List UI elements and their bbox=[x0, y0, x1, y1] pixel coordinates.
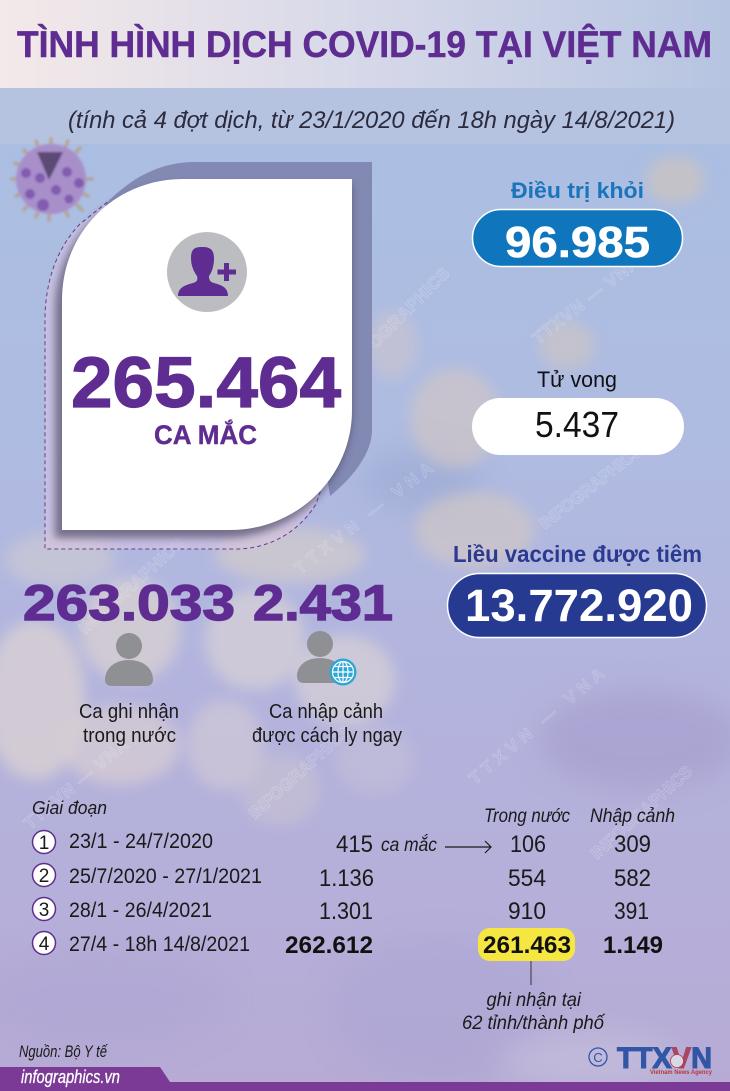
table: cases by period bbox=[32, 798, 675, 961]
number: 5.437 bbox=[535, 404, 619, 445]
card shadow bbox=[55, 185, 352, 538]
background: INFOGRAPHICS bbox=[587, 762, 696, 863]
footer bar bbox=[0, 1067, 730, 1091]
dashed outline bbox=[45, 200, 352, 549]
imported label: Ca nhập cảnh bbox=[269, 701, 383, 723]
imported cases bbox=[252, 575, 402, 747]
heading: Tử vong bbox=[537, 367, 617, 392]
row 4: 261.463 bbox=[483, 932, 571, 959]
stat: vaccine doses bbox=[448, 541, 706, 638]
number: 13.772.920 bbox=[465, 580, 693, 631]
pill bbox=[472, 210, 682, 266]
row 1: ca mắc bbox=[381, 835, 437, 856]
row 1: 23/1 - 24/7/2020 bbox=[69, 830, 213, 853]
column heading: domestic: Trong nước bbox=[484, 806, 570, 827]
heading: Liều vaccine được tiêm bbox=[453, 541, 702, 567]
row 2: 25/7/2020 - 27/1/2021 bbox=[69, 865, 262, 888]
row 1 bbox=[32, 830, 651, 858]
imported number: 2.431 bbox=[253, 575, 393, 631]
row 4: 1.149 bbox=[603, 932, 663, 959]
heading: Điều trị khỏi bbox=[511, 178, 644, 203]
icon: person bbox=[105, 633, 153, 686]
source: Nguồn: Bộ Y tế bbox=[19, 1042, 108, 1061]
icon: person with globe bbox=[297, 631, 356, 686]
callout: 62 provinces bbox=[462, 961, 605, 1034]
row 3: 391 bbox=[614, 898, 649, 925]
panel: total cases bbox=[45, 162, 372, 549]
background: INFOGRAPHICS bbox=[245, 722, 354, 823]
background: TTXVN — VNA bbox=[529, 253, 643, 348]
background: TTXVN — VNA bbox=[291, 459, 436, 578]
row 2: 1.136 bbox=[319, 865, 374, 892]
background: TTXVN — VNA bbox=[465, 664, 608, 788]
row 4: 27/4 - 18h 14/8/2021 bbox=[69, 933, 250, 956]
logo: TTXVN: TTXVN bbox=[617, 1042, 712, 1075]
pill bbox=[472, 398, 684, 455]
label: ca mắc: CA MẮC bbox=[154, 419, 257, 450]
imported label: được cách ly ngay bbox=[252, 725, 402, 747]
row 3: 1.301 bbox=[319, 898, 373, 925]
background: INFOGRAPHICS bbox=[536, 441, 646, 533]
row 1: 309 bbox=[614, 831, 651, 858]
header band bbox=[0, 0, 730, 144]
logo: TTXVN: Vietnam News Agency bbox=[650, 1069, 712, 1076]
domestic label: trong nước bbox=[83, 725, 176, 747]
row 3: 28/1 - 26/4/2021 bbox=[69, 899, 212, 922]
logo: TTXVN: C bbox=[593, 1050, 603, 1065]
row 1: 415 bbox=[336, 831, 373, 858]
domestic label: Ca ghi nhận bbox=[79, 701, 179, 723]
background: INFOGRAPHICS bbox=[75, 534, 188, 638]
background: INFOGRAPHICS bbox=[344, 264, 453, 373]
title: TÌNH HÌNH DỊCH COVID-19 TẠI VIỆT NAM bbox=[17, 23, 712, 65]
row 4 bbox=[32, 928, 663, 961]
number: 96.985 bbox=[505, 218, 650, 267]
back shape bbox=[105, 162, 372, 496]
domestic number: 263.033 bbox=[23, 575, 235, 631]
domestic label bbox=[79, 701, 179, 747]
column heading: period: Giai đoạn bbox=[32, 798, 107, 818]
icon: person plus bbox=[167, 232, 247, 312]
callout: 62 provinces: 62 tỉnh/thành phố bbox=[462, 1013, 605, 1034]
background: TTXVN — VNA bbox=[20, 735, 132, 833]
stat: deaths bbox=[472, 367, 684, 455]
row 1: 106 bbox=[510, 831, 546, 858]
row 4: 262.612 bbox=[285, 932, 373, 959]
website: infographics.vn bbox=[21, 1067, 120, 1087]
icon: virus bbox=[12, 139, 92, 220]
imported label bbox=[252, 701, 402, 747]
domestic cases bbox=[23, 575, 235, 747]
row 3: 3 bbox=[39, 900, 49, 921]
stat: recovered bbox=[472, 178, 682, 267]
white card bbox=[62, 179, 352, 530]
row 2 bbox=[32, 864, 651, 892]
pill bbox=[448, 574, 706, 638]
row 2: 2 bbox=[39, 866, 49, 887]
row 1: 1 bbox=[39, 833, 49, 854]
row 2: 554 bbox=[508, 865, 546, 892]
row 4: 4 bbox=[39, 934, 50, 955]
column heading: imported: Nhập cảnh bbox=[590, 806, 675, 827]
row 3 bbox=[32, 898, 649, 925]
callout: 62 provinces: ghi nhận tại bbox=[486, 990, 582, 1011]
row 3: 910 bbox=[508, 898, 546, 925]
subtitle: (tính cả 4 đợt dịch, từ 23/1/2020 đến 18h ngày 14/8/2021) bbox=[68, 107, 675, 134]
row 2: 582 bbox=[614, 865, 651, 892]
total number: 265.464 bbox=[71, 344, 342, 423]
